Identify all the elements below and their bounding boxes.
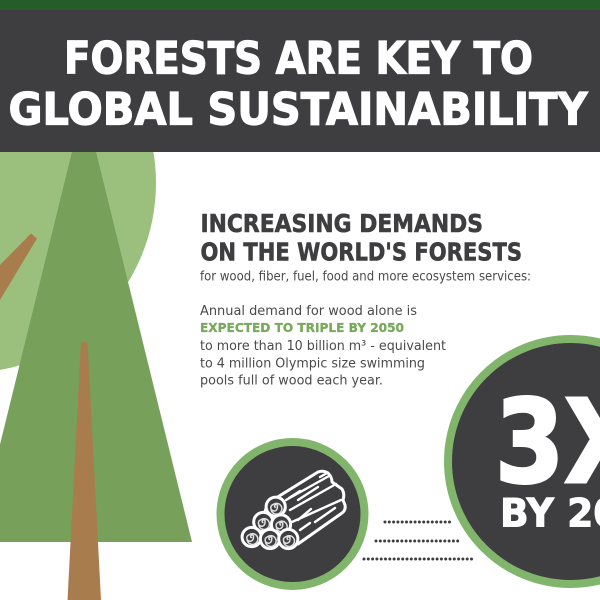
illustration: trees <box>0 0 192 600</box>
heading: increasing demands: ON THE WORLD'S FORESTS <box>200 238 522 266</box>
body text block: Annual demand for wood alone is <box>200 304 417 319</box>
tree crown: round light green <box>0 0 156 373</box>
dotted connector lines <box>364 522 472 559</box>
body text block: to more than 10 billion m³ - equivalent <box>200 339 446 354</box>
body text block <box>200 304 446 388</box>
tree crown: triangular green <box>0 103 192 542</box>
title <box>8 34 588 136</box>
body text block: to 4 million Olympic size swimming <box>200 356 425 372</box>
tree trunk <box>68 342 101 600</box>
icon: stack of logs <box>242 471 345 549</box>
icon circle: logs <box>220 442 364 586</box>
body text block: pools full of wood each year. <box>200 374 383 388</box>
title: FORESTS ARE KEY TO <box>64 34 533 84</box>
heading: increasing demands: INCREASING DEMANDS <box>200 209 483 238</box>
heading: increasing demands <box>200 209 522 266</box>
callout circle: 3X by 2050 <box>448 339 600 584</box>
subheading: for wood, fiber, fuel, food and more ecosystem services: <box>200 270 531 284</box>
top green band <box>0 0 600 10</box>
highlight: expected to triple: EXPECTED TO TRIPLE BY 2050 <box>200 320 404 335</box>
branch of round tree <box>0 234 37 300</box>
header banner <box>0 10 600 152</box>
